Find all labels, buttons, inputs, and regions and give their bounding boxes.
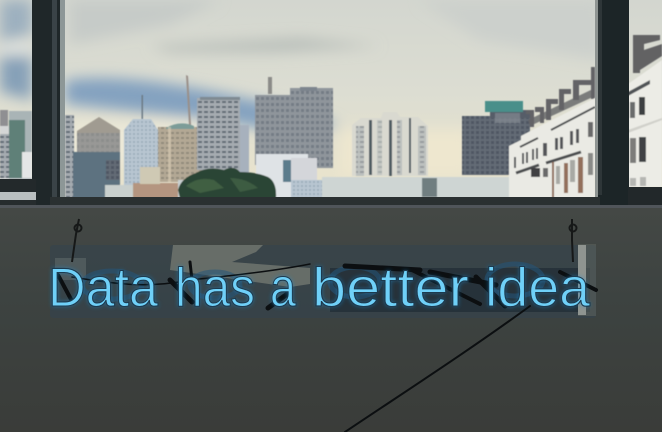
- left mullion: [32, 0, 65, 208]
- pale blue tower: [124, 119, 158, 190]
- crane and spires: [142, 75, 272, 125]
- peaked grey tower with dark base: [73, 117, 120, 198]
- neon glow: idea: [485, 256, 590, 318]
- low white wall: [322, 177, 552, 198]
- window reflection: [170, 245, 310, 287]
- sky seen through the window: [0, 0, 662, 205]
- neon glow: Data: [48, 256, 158, 318]
- roof brackets: [526, 67, 595, 127]
- brown low-rise: [105, 167, 196, 198]
- slim tower at window edge: [65, 115, 74, 200]
- neon tube reflections: [82, 264, 543, 299]
- twin grey towers: [255, 87, 333, 168]
- facade: [509, 98, 595, 198]
- ground floor columns: [531, 168, 540, 177]
- neon tubes: better: [312, 256, 469, 318]
- neon glow: [48, 256, 590, 318]
- power cord: [345, 306, 530, 432]
- neon tubes: [48, 256, 590, 318]
- dark office tower with teal sign: [462, 101, 530, 175]
- left pane buildings: [0, 110, 32, 181]
- low white and teal office: [256, 154, 332, 198]
- wall: [0, 208, 662, 432]
- tan domed tower: [158, 123, 210, 182]
- acrylic sign panel: [50, 244, 596, 318]
- neon tubes: has: [175, 256, 255, 318]
- hanging hooks: [72, 219, 576, 262]
- black cables behind the neon: [58, 262, 596, 432]
- white apartment tower: [352, 112, 428, 176]
- neon glow: better: [312, 256, 469, 318]
- dark shadow behind right side of sign: [330, 268, 590, 312]
- bottom sill: [50, 197, 600, 205]
- right mullion: [597, 0, 629, 208]
- checkered tower: [197, 97, 249, 175]
- neon tubes: idea: [485, 256, 590, 318]
- neon tubes: a: [270, 256, 296, 318]
- windows: [514, 122, 593, 175]
- neon glow: a: [270, 256, 296, 318]
- neon tubes: Data: [48, 256, 158, 318]
- cornices: [516, 107, 595, 173]
- green tree canopy: [178, 168, 276, 198]
- neon glow: has: [175, 256, 255, 318]
- city skyline: [0, 35, 662, 200]
- right pane apartments: [628, 35, 662, 187]
- right pane rail: [628, 187, 662, 208]
- window frame: [0, 0, 662, 208]
- left pane rail: [0, 179, 36, 192]
- neon text: [48, 256, 590, 318]
- terrace apartments: [509, 67, 595, 198]
